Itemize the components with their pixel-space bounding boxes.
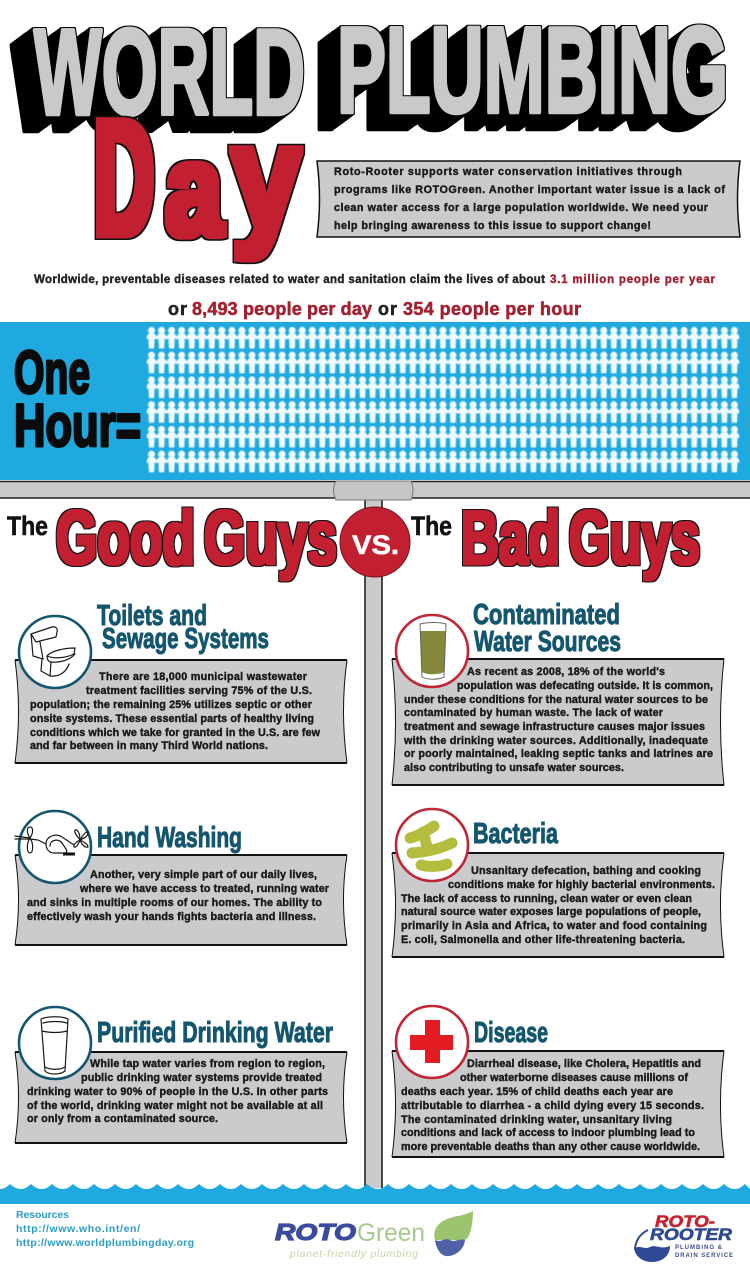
- text box: There are 18,000 municipal wastewater: [99, 671, 308, 683]
- text box: where we have access to treated, running water: [79, 883, 330, 895]
- text box: As recent as 2008, 18% of the world's: [467, 666, 665, 678]
- text box: treatment and sewage infrastructure causes major issues: [404, 721, 705, 733]
- heading: The Bad Guys: The: [411, 511, 452, 541]
- statistic line: per day and per hour: 8,493 people per day: [192, 299, 372, 319]
- text box: deaths each year. 15% of child deaths each year are: [401, 1086, 673, 1098]
- heading: The Good Guys: The: [7, 511, 48, 541]
- panel: contaminated water sources: [392, 599, 724, 785]
- text box: of the world, drinking water might not be available at all: [27, 1100, 323, 1112]
- text box: or only from a contaminated source.: [27, 1113, 218, 1125]
- text box: [392, 1051, 724, 1157]
- logo: RotoGreen: ROTO: [275, 1219, 356, 1245]
- heading: Sewage Systems: [102, 623, 269, 655]
- text box: Diarrheal disease, like Cholera, Hepatitis and: [467, 1058, 701, 1070]
- resources: Resources: [16, 1209, 69, 1221]
- heading: Disease: [474, 1017, 548, 1049]
- panel: one hour band: [0, 322, 750, 480]
- text box: contaminated by human waste. The lack of water: [404, 707, 664, 719]
- text box: effectively wash your hands fights bacteria and illness.: [27, 911, 316, 923]
- heading: Purified Drinking Water: [97, 1017, 333, 1049]
- text box: population was defecating outside. It is common,: [457, 680, 713, 692]
- logo: Roto-Rooter: ROOTER: [650, 1226, 732, 1244]
- text box: E. coli, Salmonella and other life-threatening bacteria.: [401, 934, 685, 946]
- text box: and sinks in multiple rooms of our homes. The ability to: [27, 897, 322, 909]
- text box: primarily in Asia and Africa, to water and food containing: [401, 920, 707, 932]
- heading: Toilets and: [97, 600, 207, 632]
- icon: red cross: [396, 1006, 468, 1078]
- heading: The Good Guys: Good Guys: [56, 496, 337, 581]
- panel: toilets and sewage: [15, 600, 347, 763]
- badge: VS: [340, 507, 410, 577]
- logo: Roto-Rooter: ROTO-: [655, 1213, 716, 1231]
- statistic line: per year: 3.1 million people per year: [550, 274, 716, 286]
- text box: While tap water varies from region to region,: [90, 1058, 325, 1070]
- heading: The Good Guys: [7, 496, 337, 581]
- logo: Roto-Rooter: DRAIN SERVICE: [675, 1253, 733, 1259]
- statistic line: per day and per hour: 354 people per hour: [403, 299, 581, 319]
- statistic line: per day and per hour: or: [378, 299, 397, 319]
- panel: intro text: help bringing awareness to this issue to support change!: [334, 220, 651, 232]
- heading: Hand Washing: [97, 822, 242, 854]
- panel: hand washing: [15, 811, 347, 945]
- logo: RotoGreen: [275, 1211, 473, 1260]
- panel: intro text: clean water access for a large population worldwide. We need your: [334, 202, 709, 214]
- pictogram: 354 people: [146, 326, 740, 474]
- icon: clean glass: [19, 1007, 91, 1079]
- heading: Contaminated: [473, 599, 620, 631]
- title: World Plumbing: WORLD: [34, 4, 305, 140]
- text box: under these conditions for the natural water sources to be: [404, 694, 708, 706]
- text box: public drinking water systems provide treated: [81, 1072, 322, 1084]
- heading: One Hour =: One: [14, 339, 90, 406]
- title: Day: [94, 86, 301, 271]
- logo: Roto-Rooter: PLUMBING &: [675, 1245, 723, 1251]
- text box: conditions and lack of access to indoor plumbing lead to: [401, 1127, 695, 1139]
- logo: Roto-Rooter: [634, 1213, 733, 1262]
- resources: http://www.who.int/en/: [16, 1223, 140, 1235]
- text box: onsite systems. These essential parts of healthy living: [30, 713, 314, 725]
- text box: conditions make for highly bacterial environments.: [448, 879, 715, 891]
- logo: RotoGreen: Green: [357, 1219, 425, 1247]
- panel: intro text: [317, 161, 740, 237]
- text box: [15, 855, 347, 945]
- text box: The contaminated drinking water, unsanitary living: [401, 1114, 672, 1126]
- water wave: [0, 1184, 750, 1204]
- resources: http://www.worldplumbingday.org: [16, 1237, 194, 1249]
- title: Day: a: [165, 116, 224, 263]
- text box: natural source water exposes large populations of people,: [401, 906, 701, 918]
- panel: intro text: programs like ROTOGreen. Another important water issue is a lack of: [334, 184, 725, 196]
- text box: conditions which we take for granted in the U.S. are few: [30, 727, 321, 739]
- panel: bacteria: [392, 809, 724, 957]
- text box: and far between in many Third World nations.: [30, 740, 268, 752]
- icon: faucet: [15, 811, 91, 883]
- pipe: horizontal: [0, 482, 750, 498]
- text box: more preventable deaths than any other cause worldwide.: [401, 1141, 700, 1153]
- icon: toilet: [19, 616, 91, 688]
- resources: [16, 1209, 194, 1249]
- title: Day: D: [94, 86, 154, 271]
- text box: [15, 1052, 347, 1143]
- pipe: vertical: [365, 498, 382, 1188]
- badge: VS: VS.: [352, 530, 399, 560]
- icon: leaf: [434, 1211, 473, 1256]
- logo: RotoGreen: planet-friendly plumbing: [289, 1248, 418, 1260]
- panel: purified drinking water: [15, 1007, 347, 1143]
- statistic line: per year: Worldwide, preventable diseases related to water and sanitation claim the lives of about: [34, 274, 545, 286]
- heading: [473, 599, 621, 658]
- pipe: joint: [334, 481, 413, 500]
- text box: The lack of access to running, clean water or even clean: [401, 893, 692, 905]
- title: World Plumbing: [34, 2, 728, 140]
- heading: One Hour =: Hour=: [14, 392, 141, 459]
- text box: with the drinking water sources. Additionally, inadequate: [403, 735, 708, 747]
- text box: or poorly maintained, leaking septic tanks and latrines are: [404, 748, 713, 760]
- text box: other waterborne diseases cause millions of: [460, 1072, 688, 1084]
- text box: Another, very simple part of our daily lives,: [90, 869, 317, 881]
- icon: dirty glass: [396, 615, 468, 687]
- title: Day: y: [231, 92, 301, 260]
- text box: also contributing to unsafe water sources.: [404, 762, 624, 774]
- panel: disease: [392, 1006, 724, 1157]
- text box: [15, 660, 347, 763]
- text box: attributable to diarrhea - a child dying every 15 seconds.: [401, 1100, 704, 1112]
- text box: population; the remaining 25% utilizes septic or other: [30, 699, 313, 711]
- heading: Bacteria: [473, 818, 559, 850]
- text box: [392, 853, 724, 957]
- statistic line: per day and per hour: [168, 299, 581, 319]
- text box: [392, 659, 724, 785]
- panel: intro text: Roto-Rooter supports water conservation initiatives through: [334, 166, 682, 178]
- text box: Unsanitary defecation, bathing and cooking: [471, 865, 701, 877]
- heading: Water Sources: [474, 626, 621, 658]
- statistic line: per day and per hour: or: [168, 299, 187, 319]
- heading: One Hour =: [14, 339, 141, 459]
- icon: bacteria: [396, 809, 468, 881]
- heading: [97, 600, 269, 655]
- text box: treatment facilities serving 75% of the U.S.: [86, 685, 312, 697]
- text box: drinking water to 90% of people in the U.S. In other parts: [27, 1086, 328, 1098]
